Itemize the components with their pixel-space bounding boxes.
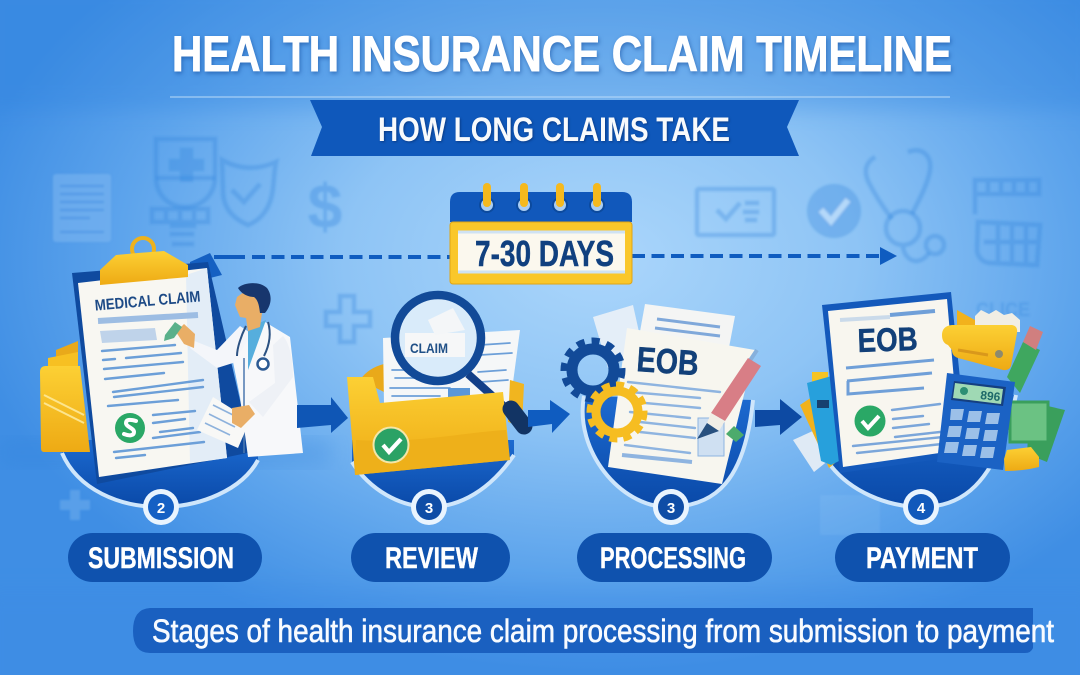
magnifier shaft (468, 374, 508, 410)
claim label: CLAIM (410, 341, 448, 356)
yellow gear (590, 385, 644, 439)
yellow clip (1004, 447, 1039, 471)
stage 2: review illustration (347, 295, 524, 507)
stage label: submission: SUBMISSION (88, 542, 234, 575)
title: HEALTH INSURANCE CLAIM TIMELINE (172, 26, 952, 82)
stage label: payment: PAYMENT (866, 542, 978, 575)
faint background healthcare icons: CLICE (976, 300, 1030, 321)
stage label: submission (68, 533, 262, 582)
stethoscope (237, 322, 270, 356)
coat body (233, 322, 303, 457)
step number badges: 4 (917, 500, 926, 517)
green seal (115, 413, 145, 443)
step number badges: 3 (667, 500, 675, 517)
subtitle ribbon (170, 97, 950, 156)
arrow 3 to 4 (755, 399, 802, 435)
yellow folder (800, 395, 835, 468)
calendar text: 7-30 DAYS (475, 233, 614, 274)
subtitle text: HOW LONG CLAIMS TAKE (378, 111, 730, 149)
EOB document (608, 328, 755, 484)
yellow card (940, 310, 1020, 370)
held paper (197, 397, 250, 448)
dashed timeline arrow (214, 247, 897, 265)
step number badges (143, 489, 939, 525)
step number badges: 2 (157, 500, 165, 517)
faint background healthcare icons: $ (308, 173, 342, 242)
neck and face (235, 287, 266, 331)
clip (132, 238, 154, 260)
blue gear (564, 341, 622, 399)
doctor (164, 283, 303, 457)
collar and scrubs (248, 320, 266, 370)
clipboard (72, 238, 252, 484)
stage 4: payment illustration (793, 292, 1065, 507)
stage label: processing: PROCESSING (600, 542, 746, 575)
arrow 2 to 3 (528, 400, 570, 433)
cash (1010, 402, 1065, 462)
EOB heading: EOB (635, 340, 700, 383)
green pen (1007, 326, 1043, 393)
pen (697, 350, 761, 442)
stage 1: submission illustration (40, 238, 303, 507)
calendar badge: 7-30 days (450, 183, 632, 284)
stage label: review: REVIEW (385, 542, 479, 575)
claim document (383, 330, 520, 405)
stage label: review (351, 533, 510, 582)
stage 3: processing illustration (564, 304, 761, 507)
small paper (793, 430, 829, 472)
magnifier lens (395, 295, 481, 381)
green check (374, 428, 408, 462)
back documents (593, 305, 643, 368)
clipboard heading: MEDICAL CLAIM (94, 288, 201, 315)
blue binder (807, 375, 843, 465)
hands and pen (176, 324, 195, 348)
raised arm (190, 326, 252, 368)
faint background healthcare icons (53, 139, 1040, 535)
calculator (937, 373, 1015, 470)
magnifier grip (511, 409, 524, 426)
folder (40, 341, 90, 452)
calculator display: 896 (980, 388, 1001, 404)
right arm (249, 336, 293, 417)
stage label: payment (835, 533, 1010, 582)
folder (347, 377, 510, 475)
hair (238, 283, 271, 313)
EOB heading: EOB (857, 320, 918, 359)
step number badges: 3 (425, 500, 433, 517)
stage label: processing (577, 533, 772, 582)
EOB paper (822, 292, 968, 473)
green check (854, 406, 886, 436)
arrow 1 to 2 (297, 397, 348, 433)
